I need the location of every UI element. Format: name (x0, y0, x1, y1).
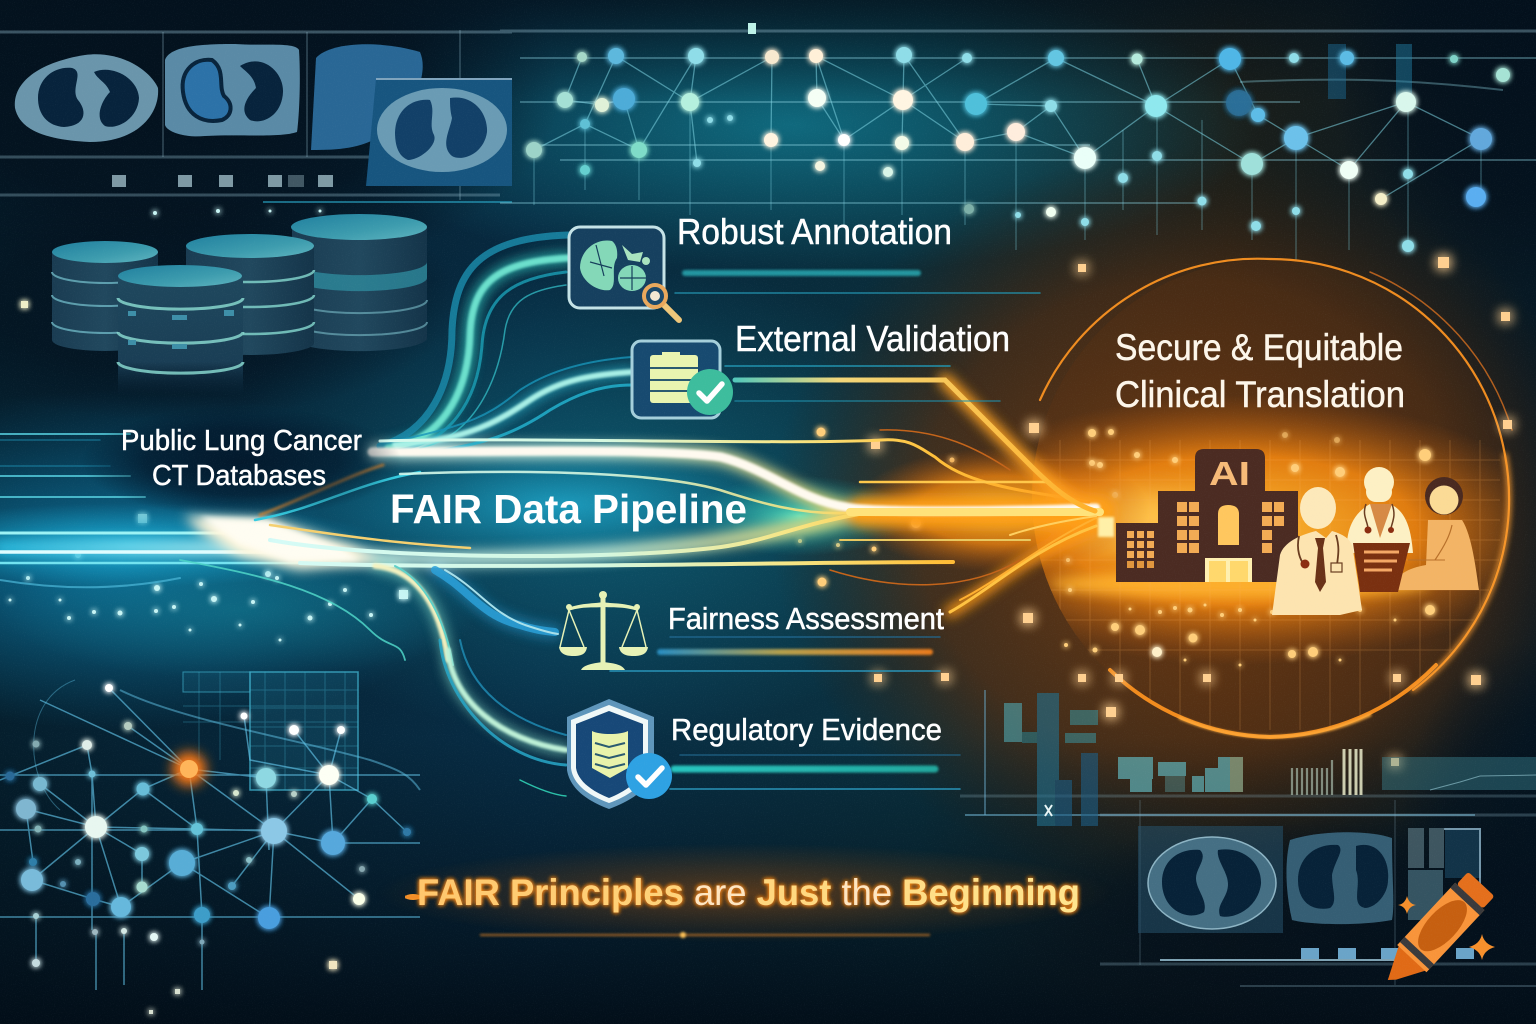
label line one: Public Lung Cancer (121, 425, 362, 457)
clipboard glyph (650, 352, 698, 403)
glowing orange squares (871, 257, 1512, 766)
node at hospital door end (1098, 517, 1114, 537)
icon: crayon (1375, 870, 1496, 996)
icon: scales of fairness (559, 591, 648, 670)
CT scan six (1286, 832, 1393, 924)
icon: AI hospital (1116, 449, 1298, 582)
icon: clinician back (1347, 467, 1413, 553)
icon: external validation (632, 341, 733, 418)
pipeline label: FAIR Data Pipeline (390, 486, 747, 532)
check badge (626, 753, 672, 799)
step four label: Regulatory Evidence (671, 712, 942, 747)
CT scan five (1138, 826, 1283, 933)
panel: CT scans bottom right (1138, 826, 1481, 960)
panel: clinical translation circle (798, 257, 1536, 766)
door (1218, 505, 1239, 545)
outcome line two: Clinical Translation (1115, 374, 1405, 415)
orange node (172, 752, 206, 786)
branch to external validation (395, 357, 632, 453)
CT scan one (15, 54, 158, 142)
CT scan four (366, 79, 512, 186)
filmstrip blocks (1160, 828, 1481, 960)
closing tagline (375, 843, 1115, 943)
label line two: CT Databases (152, 460, 326, 492)
tagline text: FAIR Principles are Just the Beginning (417, 872, 1080, 913)
outcome line one: Secure & Equitable (1115, 327, 1403, 368)
panel: database cylinders (52, 214, 427, 395)
central stream strands (270, 430, 1100, 612)
panel: network bottom left (0, 672, 421, 1014)
lower branches (375, 566, 566, 796)
icon: tablet (1353, 543, 1410, 592)
branch to robust annotation (380, 235, 568, 450)
lung glyph (580, 241, 650, 291)
labels: pipeline steps (668, 211, 1010, 747)
film strip squares (112, 175, 333, 187)
check badge (687, 369, 733, 415)
stream particles left (8, 209, 408, 642)
magnifier glyph (644, 285, 679, 320)
small orange glow (405, 894, 421, 900)
network nodes bottom (6, 684, 411, 1014)
panel: data streams (0, 235, 1150, 796)
database cylinder right (291, 214, 427, 351)
glowing ring (1040, 259, 1512, 737)
database label (121, 425, 362, 492)
database cylinder centre (186, 234, 314, 355)
left input lines (0, 434, 405, 660)
database label halo (82, 407, 402, 517)
guide lines right of icons (610, 273, 1040, 789)
tagline underline (480, 932, 930, 938)
icon: regulatory shield (567, 699, 672, 809)
windows (1127, 502, 1284, 568)
icon: robust annotation (569, 227, 679, 320)
icon: sparkles (1398, 896, 1495, 960)
stream lens interior (0, 437, 1150, 587)
chart grid (183, 672, 358, 790)
icon: clinician front (1272, 487, 1362, 615)
converging wedge (184, 465, 420, 570)
database cylinder front (118, 265, 243, 395)
panel: CT scans top left (15, 44, 512, 187)
stream soft glow (0, 258, 1100, 750)
panel: data artifacts lower right (1004, 693, 1536, 826)
outcome label (1115, 327, 1405, 415)
document glyph (592, 731, 628, 778)
CT scan three (311, 44, 423, 150)
entrance (1205, 558, 1252, 582)
step one label: Robust Annotation (677, 211, 952, 252)
step two label: External Validation (735, 318, 1010, 359)
AI sign: AI (1209, 455, 1250, 492)
CT scan two (165, 44, 300, 136)
orange particles (798, 428, 1435, 666)
database cylinder left (52, 241, 158, 351)
step three label: Fairness Assessment (668, 601, 944, 636)
external validation bar (735, 380, 1095, 511)
panel: network top right (500, 23, 1536, 260)
icon: seated patient (1391, 477, 1479, 590)
network nodes top (526, 47, 1510, 252)
